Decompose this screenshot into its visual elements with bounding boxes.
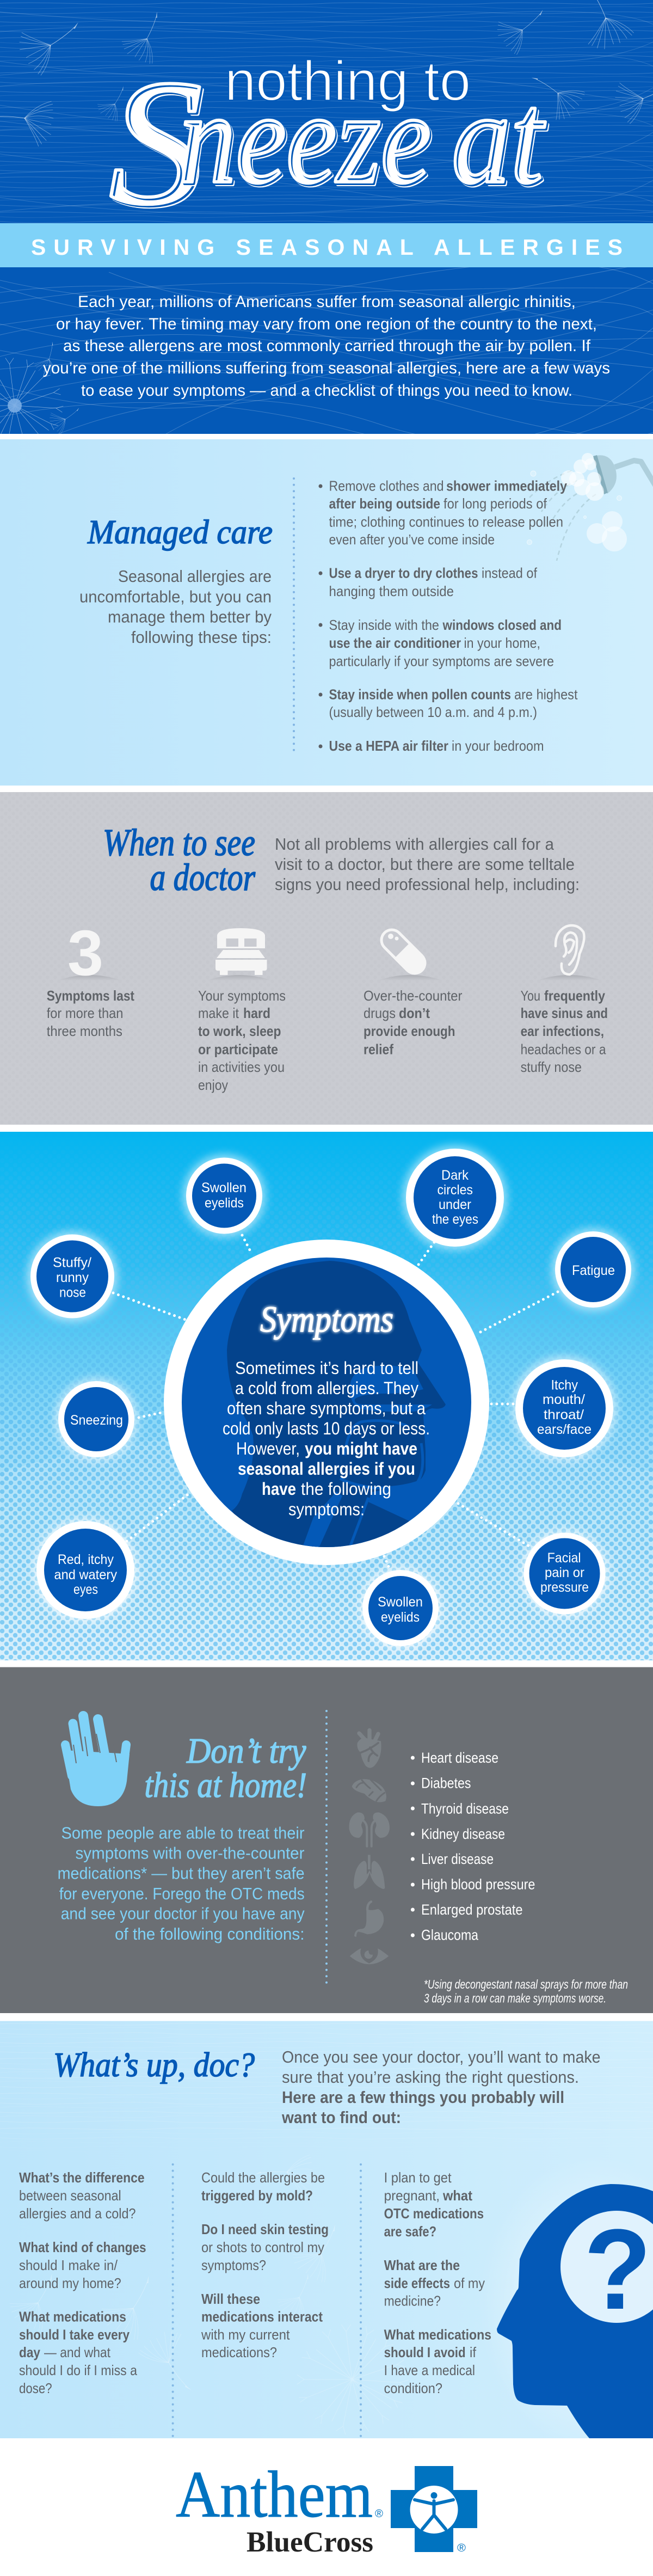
heading: don't try this at home: this at home! [145, 1765, 307, 1805]
icon: head silhouette [227, 1261, 446, 1557]
logo: Anthem BlueCross: BlueCross [247, 2526, 373, 2558]
heading: managed care: Managed care [87, 514, 273, 551]
list: conditions: Thyroid disease [421, 1800, 509, 1817]
icon: eye [350, 1948, 389, 1964]
text block: cold versus allergies: a cold from allergies. They [235, 1378, 418, 1398]
list: conditions: Kidney disease [421, 1826, 505, 1842]
title: nothing to: nothing to [225, 50, 471, 112]
list: tips: after being outside [329, 495, 440, 512]
bubble: swollen eyelids top [183, 1154, 266, 1237]
text block: OTC warning: Some people are able to treat their [61, 1823, 305, 1842]
icons: organs [349, 1730, 390, 1964]
text block: cold versus allergies: seasonal allergies if you [238, 1459, 415, 1479]
bubble: red eyes: eyes [73, 1582, 98, 1597]
text block: intro [43, 293, 610, 400]
footnote [424, 1977, 628, 2005]
text: hard to work: to work, sleep [198, 1023, 281, 1039]
list: tips: Stay inside when pollen counts [329, 686, 511, 703]
panel: managed care [0, 439, 653, 786]
bubble: stuffy nose [27, 1231, 118, 1322]
icon: hand [64, 1716, 130, 1806]
questions: column three: OTC medications [384, 2205, 484, 2222]
questions: column three [384, 2169, 491, 2396]
questions: column three: should I avoid [384, 2344, 466, 2360]
questions: column one: What’s the difference [19, 2169, 145, 2186]
text block: doctor intro: visit to a doctor, but there are some telltale [275, 855, 575, 874]
questions: column three: medicine? [384, 2293, 441, 2309]
icon: kidneys [349, 1812, 390, 1847]
text: hard to work: in activities you [198, 1059, 285, 1075]
text block: doctor questions intro: Once you see your doctor, you’ll want to make [282, 2047, 601, 2066]
bubble: dark circles: Dark [441, 1168, 469, 1183]
icon: ear [537, 925, 602, 980]
text block: OTC warning: of the following conditions: [115, 1924, 305, 1943]
questions: column one: What medications [19, 2309, 126, 2325]
questions: column one: — and what [44, 2344, 111, 2360]
list: tips: Use a dryer to dry clothes [329, 565, 478, 581]
text block: doctor intro [275, 835, 580, 894]
bubble: itchy: ears/face [537, 1422, 592, 1437]
heading: don't try this at home: Don’t try [186, 1731, 306, 1771]
text: hard to work: enjoy [198, 1077, 228, 1093]
icon: dandelion seeds [0, 0, 653, 453]
questions: column three: of my [454, 2275, 485, 2291]
bubble: fatigue [552, 1228, 634, 1311]
central circle [164, 1240, 489, 1565]
questions: column two [201, 2169, 329, 2360]
text block: OTC warning: medications* — but they aren’t safe [58, 1864, 305, 1883]
questions: column three: condition? [384, 2380, 442, 2396]
bubble: stuffy nose: Stuffy/ [53, 1255, 91, 1271]
list: tips: use the air conditioner [329, 635, 461, 651]
heading: when to see a doctor: When to see [103, 822, 255, 864]
bubble: red eyes: Red, itchy [58, 1552, 114, 1567]
bubble: facial pain: pressure [540, 1580, 589, 1595]
text: symptoms last: three months [47, 1023, 122, 1039]
bubble: facial pain [520, 1530, 608, 1618]
text block: cold versus allergies: the following [301, 1479, 391, 1499]
text block: managed care intro: Seasonal allergies are [118, 567, 272, 586]
heading: what's up doc: What’s up, doc? [53, 2045, 255, 2084]
questions: column one: should I do if I miss a [19, 2362, 137, 2378]
text block: managed care intro: uncomfortable, but you can [79, 587, 272, 606]
questions: column three: side effects [384, 2275, 450, 2291]
questions: column three: if [470, 2344, 477, 2360]
text block: doctor intro: signs you need professional help, including: [275, 875, 580, 894]
icon: stomach [354, 1902, 384, 1937]
list: tips: windows closed and [442, 617, 562, 633]
bubble: itchy: Itchy [551, 1377, 578, 1393]
questions: column three: I plan to get [384, 2169, 452, 2186]
icon: number three [58, 917, 121, 989]
questions: column one [19, 2169, 146, 2396]
band: subtitle: SURVIVING SEASONAL ALLERGIES [31, 235, 623, 260]
text block: doctor questions intro: sure that you’re asking the right questions. [282, 2068, 579, 2087]
text block: managed care intro: manage them better by [108, 608, 272, 626]
text block: intro: as these allergens are most commonly carried through the air by pollen. If [63, 337, 591, 355]
title: Sneeze at: neeze [179, 65, 431, 210]
text: over the counter: drugs [364, 1005, 396, 1021]
text block: intro: you’re one of the millions suffering from seasonal allergies, here are a few ways [43, 359, 610, 377]
list: tips: even after you’ve come inside [329, 531, 495, 548]
text: infections: ear infections, [521, 1023, 604, 1039]
questions: column three: I have a medical [384, 2362, 475, 2378]
text block: cold versus allergies: cold only lasts 10 days or less. [223, 1419, 430, 1438]
questions: column three: what [442, 2187, 472, 2204]
text block: cold versus allergies: have [262, 1479, 296, 1499]
list: tips: hanging them outside [329, 583, 454, 599]
text block: doctor questions intro: Here are a few things you probably will [282, 2088, 564, 2107]
bubble: dark circles: under [439, 1197, 471, 1212]
text: over the counter: Over-the-counter [364, 988, 463, 1004]
text block: managed care intro [79, 567, 272, 647]
list: tips: shower immediately [446, 478, 567, 494]
questions: column two: Do I need skin testing [201, 2221, 329, 2237]
questions: column one: What kind of changes [19, 2239, 146, 2255]
bubble: red eyes [33, 1518, 138, 1622]
heading: when to see a doctor [103, 822, 256, 899]
bubble: stuffy nose: runny [56, 1270, 89, 1285]
text: infections: headaches or a [521, 1041, 606, 1057]
heading: don't try this at home [145, 1731, 307, 1805]
list: tips: particularly if your symptoms are severe [329, 653, 554, 670]
panel: when to see a doctor [0, 792, 653, 1125]
text block: cold versus allergies: you might have [305, 1439, 417, 1458]
text: over the counter: don’t [399, 1005, 430, 1021]
text block: cold versus allergies [223, 1358, 430, 1519]
text block: OTC warning: for everyone. Forego the OTC meds [59, 1884, 305, 1903]
text: hard to work: make it [198, 1005, 239, 1021]
text block: intro: Each year, millions of Americans suffer from seasonal allergic rhinitis, [78, 293, 576, 311]
heading: when to see a doctor: a doctor [150, 857, 256, 899]
panel: header [0, 0, 653, 453]
list: tips: time; clothing continues to release pollen [329, 514, 563, 530]
text: symptoms last: Symptoms last [47, 988, 134, 1004]
list: tips: (usually between 10 a.m. and 4 p.m.) [329, 704, 537, 720]
text: infections: frequently [544, 988, 605, 1004]
bubble: fatigue: Fatigue [572, 1263, 615, 1278]
text: over the counter: provide enough [364, 1023, 455, 1039]
logo: Anthem BlueCross: ® [457, 2542, 466, 2554]
bubble: dark circles: the eyes [432, 1212, 478, 1227]
bubble: swollen eyelids bottom: Swollen [378, 1594, 423, 1610]
text: symptoms last: for more than [47, 1005, 123, 1021]
bubble: itchy: throat/ [544, 1407, 584, 1422]
icon: brain [352, 1779, 386, 1802]
text: infections: have sinus and [521, 1005, 608, 1021]
text: over the counter [364, 988, 463, 1057]
questions: column one: around my home? [19, 2275, 121, 2291]
list: tips: in your bedroom [452, 738, 544, 754]
bubble: swollen eyelids bottom [359, 1567, 442, 1649]
icon: blue cross [391, 2466, 477, 2552]
questions: column two: with my current [201, 2327, 290, 2343]
text: hard to work: hard [243, 1005, 270, 1021]
icon: pill [378, 934, 442, 980]
text block: OTC warning: symptoms with over-the-counter [75, 1844, 305, 1863]
panel: don't try this at home [0, 1667, 653, 2013]
text block: cold versus allergies: Sometimes it’s hard to tell [235, 1358, 418, 1378]
questions: column one: dose? [19, 2380, 52, 2396]
icon: bed [207, 928, 272, 980]
questions: column three: are safe? [384, 2223, 436, 2240]
logo: Anthem BlueCross [176, 2458, 477, 2558]
icon: head with question mark [497, 2184, 653, 2438]
questions: column one: between seasonal [19, 2187, 121, 2204]
title: Sneeze at: S [109, 43, 202, 242]
questions: column two: or shots to control my [201, 2239, 324, 2255]
list: tips [319, 478, 578, 754]
bubble: itchy: mouth/ [543, 1392, 585, 1407]
text block: managed care intro: following these tips: [131, 628, 272, 647]
list: tips: in your home, [464, 635, 540, 651]
icon: heart [357, 1730, 381, 1768]
text block: doctor questions intro: want to find out: [281, 2108, 401, 2127]
text block: cold versus allergies: often share symptoms, but a [227, 1399, 426, 1418]
list: tips: Remove clothes and [329, 478, 444, 494]
list: tips: instead of [482, 565, 538, 581]
bubble: facial pain: pain or [545, 1565, 584, 1580]
text block: intro: or hay fever. The timing may vary from one region of the country to the next, [56, 315, 597, 333]
bubble: swollen eyelids top: eyelids [205, 1195, 244, 1211]
icon: number three: 3 [67, 917, 103, 989]
bubble: swollen eyelids top: Swollen [201, 1180, 247, 1195]
bubble: dark circles: circles [438, 1182, 473, 1198]
list: tips: Use a HEPA air filter [329, 738, 448, 754]
list: tips: for long periods of [443, 495, 547, 512]
text: infections [521, 988, 608, 1075]
band: subtitle [0, 223, 653, 267]
text: symptoms last [47, 988, 134, 1039]
list: conditions: Liver disease [421, 1851, 494, 1867]
questions: column three: pregnant, [384, 2187, 440, 2204]
bubble: sneezing: Sneezing [70, 1413, 123, 1428]
text block: cold versus allergies: However, [236, 1439, 300, 1458]
questions: column one: allergies and a cold? [19, 2205, 136, 2222]
questions: column two: symptoms? [201, 2257, 266, 2273]
bubble: itchy [512, 1356, 617, 1461]
list: conditions: Diabetes [421, 1775, 471, 1792]
bubble: swollen eyelids bottom: eyelids [381, 1610, 420, 1625]
bubble: sneezing [55, 1378, 138, 1461]
text block: cold versus allergies: symptoms: [288, 1499, 365, 1519]
text block: OTC warning [58, 1823, 305, 1943]
list: conditions [411, 1750, 535, 1943]
bubble: facial pain: Facial [547, 1550, 581, 1566]
text: hard to work: or participate [198, 1041, 278, 1057]
questions: column one: should I take every [19, 2327, 130, 2343]
logo: Anthem BlueCross: Anthem [176, 2458, 373, 2531]
questions: column two: Will these [201, 2291, 260, 2307]
list: tips: Stay inside with the [329, 617, 439, 633]
questions: column two: Could the allergies be [201, 2169, 325, 2186]
list: tips: are highest [514, 686, 578, 703]
text block: doctor questions intro [281, 2047, 601, 2127]
questions: column two: triggered by mold? [201, 2187, 313, 2204]
title: Sneeze at: at [452, 65, 546, 210]
title: Sneeze at [109, 43, 546, 242]
list: conditions: Heart disease [421, 1750, 498, 1766]
questions: column two: medications? [201, 2344, 277, 2360]
text: hard to work: Your symptoms [198, 988, 286, 1004]
questions: column one: should I make in/ [19, 2257, 118, 2273]
bubble: stuffy nose: nose [59, 1285, 86, 1300]
text: infections: stuffy nose [521, 1059, 582, 1075]
questions: column one: day [19, 2344, 40, 2360]
text: infections: You [521, 988, 540, 1004]
text block: intro: to ease your symptoms — and a checklist of things you need to know. [81, 382, 572, 400]
panel: what's up doc [0, 2021, 653, 2450]
text block: doctor intro: Not all problems with allergies call for a [275, 835, 555, 854]
questions: column three: What are the [384, 2257, 460, 2273]
icon: head with question mark: ? [584, 2205, 651, 2333]
bubble: red eyes: and watery [54, 1567, 117, 1583]
questions: column three: What medications [384, 2327, 491, 2343]
list: conditions: Enlarged prostate [421, 1902, 522, 1918]
icon: lungs [354, 1855, 385, 1889]
panel: symptoms [0, 1132, 653, 1660]
text: hard to work [198, 988, 286, 1093]
logo: Anthem BlueCross: ® [375, 2508, 383, 2520]
questions: column two: medications interact [201, 2309, 323, 2325]
text block: OTC warning: and see your doctor if you have any [61, 1904, 305, 1923]
icon: shower [527, 453, 653, 561]
list: conditions: High blood pressure [421, 1876, 535, 1893]
list: conditions: Glaucoma [421, 1927, 479, 1943]
heading: symptoms: Symptoms [260, 1298, 393, 1340]
text: over the counter: relief [364, 1041, 393, 1057]
bubble: dark circles [403, 1145, 507, 1250]
